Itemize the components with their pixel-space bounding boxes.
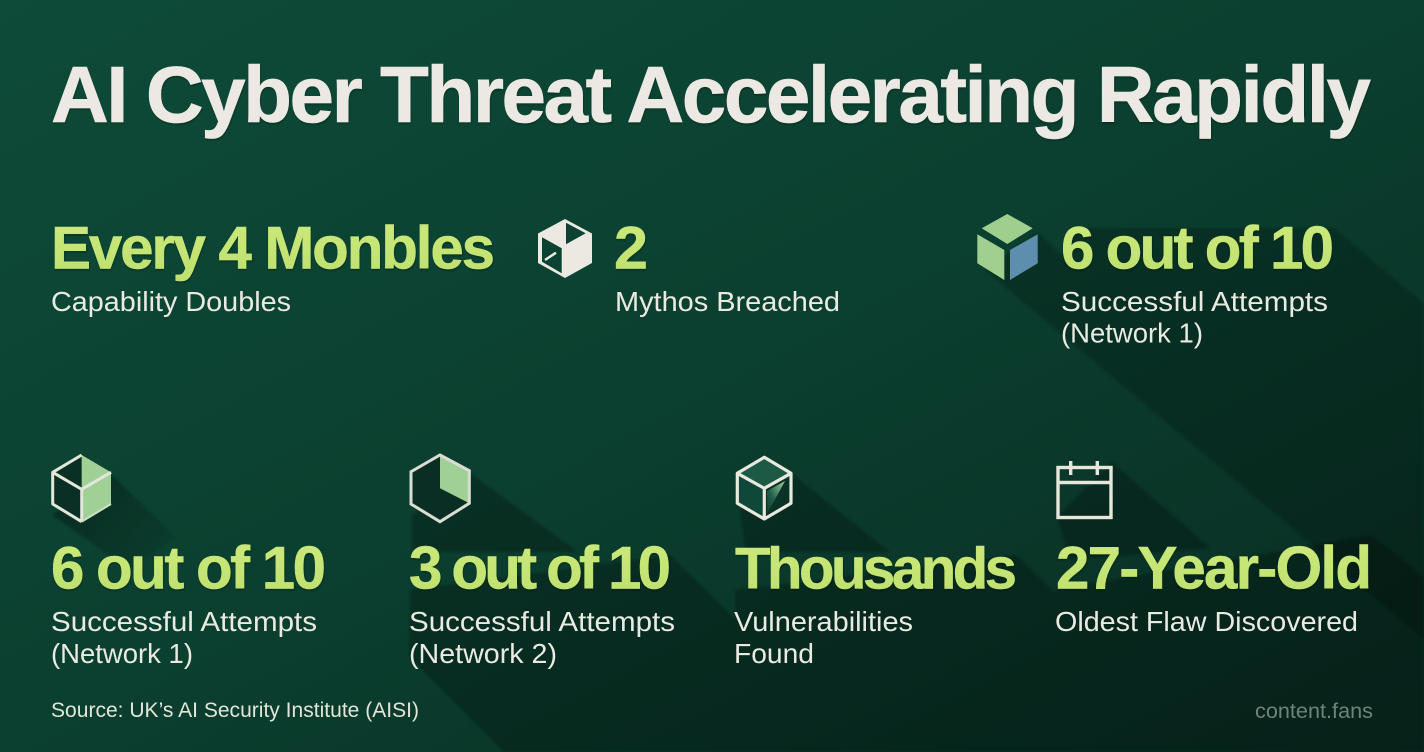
stat: 3 out of 10: (Network 2) [409, 638, 557, 669]
title: AI Cyber Threat Accelerating Rapidly [51, 50, 1372, 139]
stat: 3 out of 10: 3 out of 10 [409, 534, 671, 602]
stat: thousands: Vulnerabilities [734, 606, 913, 637]
long diagonal shadows [52, 228, 1424, 752]
stat: 6 out of 10 top: (Network 1) [1061, 318, 1203, 348]
stat: 6 out of 10 network 1: 6 out of 10 [51, 534, 326, 602]
stat: 6 out of 10 network 1: Successful Attempts [51, 606, 317, 637]
stat: 6 out of 10 network 1: (Network 1) [51, 638, 193, 669]
stat: thousands: Thousands [735, 536, 1017, 602]
stat: 6 out of 10 top: 6 out of 10 [1061, 214, 1334, 282]
stat: 3 out of 10: Successful Attempts [409, 606, 675, 637]
watermark: content.fans [1255, 700, 1373, 723]
stat: thousands [734, 536, 1017, 669]
stat: mythos breached [614, 214, 840, 317]
stat: 27-year-old [1055, 534, 1372, 637]
stat: mythos breached: 2 [614, 214, 648, 282]
stat: thousands: Found [734, 638, 814, 669]
stat: every 4 months [51, 214, 495, 317]
icon: half green cube [53, 455, 111, 522]
icon: outlined cube [737, 457, 791, 519]
icon: colored cube [977, 214, 1038, 280]
stat: mythos breached: Mythos Breached [615, 286, 840, 317]
icon: solid white cube [538, 219, 592, 278]
stat: 6 out of 10 network 1 [51, 534, 326, 669]
stat: 27-year-old: Oldest Flaw Discovered [1055, 606, 1358, 637]
stat: every 4 months: Every 4 Monbles [51, 214, 495, 282]
source note: Source: UK’s AI Security Institute (AISI) [51, 699, 419, 722]
icon: hexagon with green segment [411, 455, 469, 522]
stat: 6 out of 10 top: Successful Attempts [1061, 286, 1328, 317]
stat: 3 out of 10 [409, 534, 675, 669]
icon: calendar [1058, 461, 1111, 518]
stat: 27-year-old: 27-Year-Old [1056, 534, 1372, 602]
stat: every 4 months: Capability Doubles [51, 286, 291, 317]
stat: 6 out of 10 top [1061, 214, 1334, 348]
